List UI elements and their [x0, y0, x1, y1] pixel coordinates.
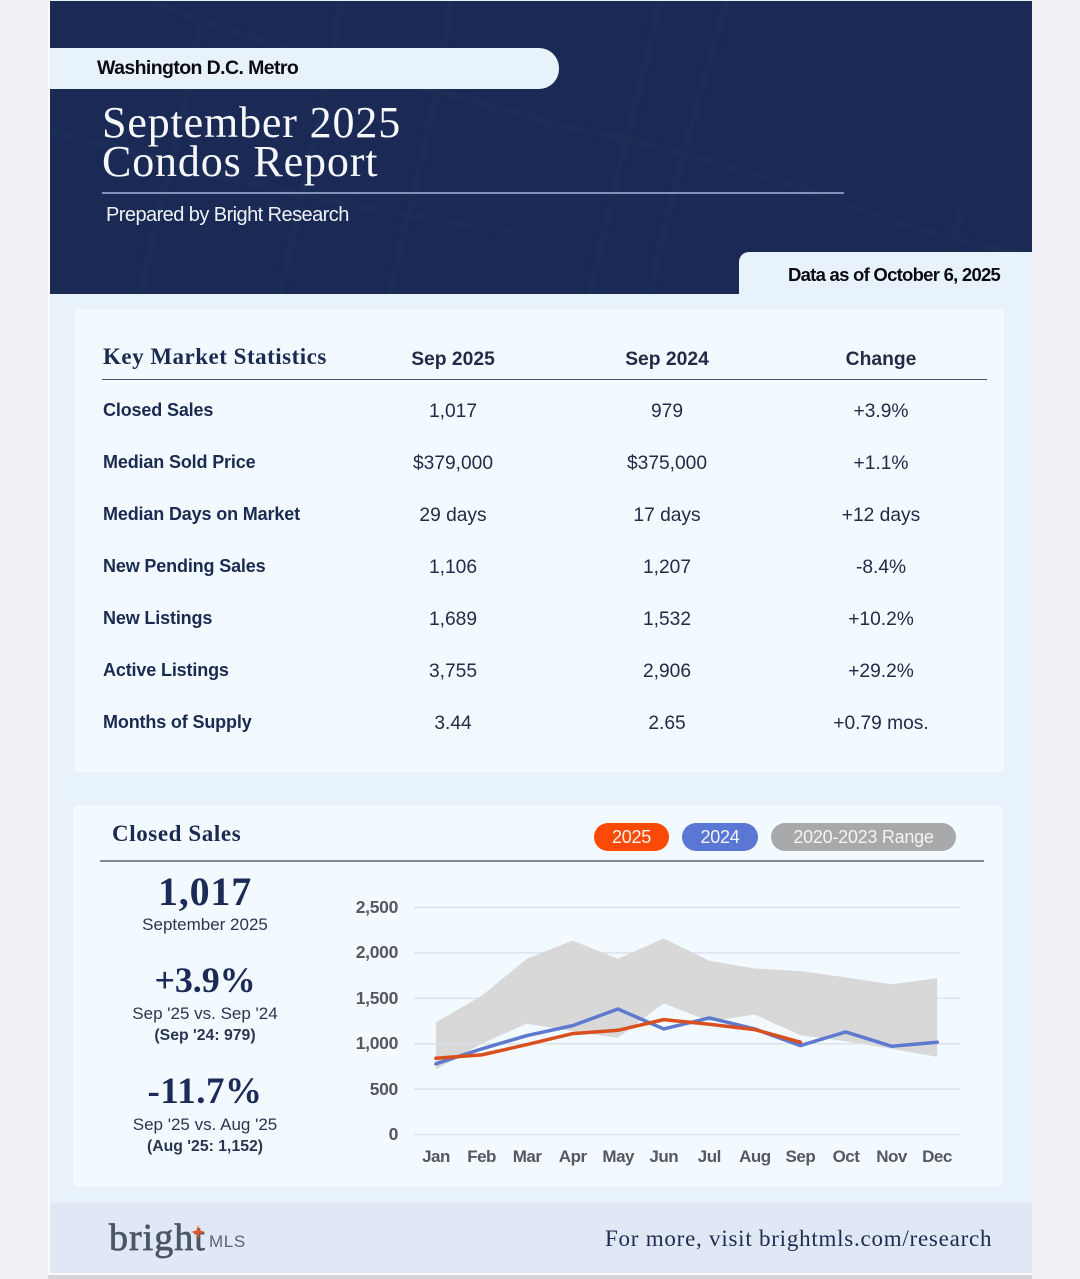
x axis labels: Apr	[559, 1147, 587, 1166]
column headers	[411, 349, 916, 370]
icon: orange star	[191, 1225, 205, 1239]
2025 line	[436, 1020, 800, 1058]
statistics heading: Key Market Statistics	[103, 344, 327, 369]
header rule	[102, 192, 844, 194]
stat: month over month: Sep '25 vs. Aug '25	[133, 1115, 277, 1134]
row: median days on market: +12 days	[842, 505, 920, 526]
row: new listings: New Listings	[103, 608, 212, 628]
stat: month over month	[133, 1071, 277, 1155]
x axis labels: Sep	[786, 1147, 815, 1166]
legend: 2024: 2024	[700, 827, 740, 847]
row: median days on market: 29 days	[419, 505, 487, 526]
row: months of supply: +0.79 mos.	[833, 713, 929, 734]
x axis labels: Oct	[833, 1147, 860, 1166]
region pill	[50, 48, 559, 89]
row: months of supply: 3.44	[434, 713, 472, 734]
row: new listings: 1,689	[429, 609, 477, 630]
closed sales heading: Closed Sales	[112, 821, 241, 846]
row: median days on market: 17 days	[633, 505, 701, 526]
footer link text: For more, visit brightmls.com/research	[605, 1226, 992, 1251]
legend: 2020-2023 range: 2020-2023 Range	[793, 827, 934, 847]
row: new pending sales: 1,207	[643, 557, 691, 578]
prepared by: Prepared by Bright Research	[106, 204, 349, 226]
panel: key market statistics	[74, 309, 1004, 772]
x axis labels: May	[602, 1147, 635, 1166]
x axis labels: Dec	[922, 1147, 952, 1166]
x axis labels: Feb	[467, 1147, 496, 1166]
data date tab	[739, 252, 1032, 294]
row: months of supply: 2.65	[648, 713, 686, 734]
column headers: Sep 2025	[411, 349, 495, 370]
x axis labels: Nov	[876, 1147, 908, 1166]
row: active listings: 2,906	[643, 661, 691, 682]
legend: 2024	[682, 823, 758, 851]
row: median sold price: +1.1%	[854, 453, 908, 474]
stat: current closed sales: 1,017	[158, 869, 252, 914]
row: active listings	[103, 660, 914, 682]
stat: year over year	[132, 960, 278, 1044]
logo: bright MLS: MLS	[209, 1232, 246, 1251]
x axis labels: Jun	[649, 1147, 678, 1166]
x axis labels	[422, 1147, 952, 1166]
row: active listings: Active Listings	[103, 660, 229, 680]
stat: month over month: -11.7%	[147, 1071, 263, 1112]
stat: year over year: (Sep '24: 979)	[154, 1027, 256, 1044]
row: closed sales	[103, 400, 908, 422]
row: closed sales: Closed Sales	[103, 400, 213, 420]
stat: current closed sales: September 2025	[142, 915, 268, 934]
row: new pending sales	[103, 556, 906, 578]
x axis labels: Mar	[513, 1147, 542, 1166]
row: median sold price: $375,000	[627, 453, 707, 474]
column headers: Change	[846, 349, 916, 370]
row: median sold price: $379,000	[413, 453, 493, 474]
2020-2023 range band	[436, 939, 937, 1069]
row: new listings: 1,532	[643, 609, 691, 630]
legend: 2020-2023 range	[771, 823, 956, 851]
report title: September 2025	[102, 98, 401, 147]
row: closed sales: 1,017	[429, 401, 477, 422]
row: median sold price: Median Sold Price	[103, 452, 256, 472]
stat: month over month: (Aug '25: 1,152)	[147, 1138, 263, 1155]
x axis labels: Jul	[698, 1147, 721, 1166]
row: months of supply	[103, 712, 929, 734]
logo: bright MLS: bright	[109, 1217, 206, 1259]
data date: Data as of October 6, 2025	[788, 264, 1000, 285]
row: median days on market: Median Days on Market	[103, 504, 300, 524]
row: new pending sales: -8.4%	[856, 557, 906, 578]
y axis labels	[356, 897, 399, 1144]
row: new pending sales: New Pending Sales	[103, 556, 266, 576]
x axis labels: Aug	[739, 1147, 771, 1166]
legend: 2025: 2025	[612, 827, 651, 847]
row: new listings	[103, 608, 914, 630]
footer band	[50, 1203, 1032, 1273]
report title	[102, 98, 401, 186]
panel: closed sales	[73, 805, 1002, 1187]
stat: year over year: +3.9%	[154, 960, 256, 1000]
y axis labels: 0	[389, 1124, 399, 1144]
2024 line	[436, 1009, 937, 1064]
header banner	[50, 1, 1032, 294]
y axis labels: 1,500	[356, 988, 399, 1008]
report title: Condos Report	[102, 137, 378, 186]
y axis labels: 2,000	[356, 942, 399, 962]
row: closed sales: +3.9%	[854, 401, 908, 422]
y axis labels: 2,500	[356, 897, 399, 917]
y axis labels: 500	[370, 1079, 399, 1099]
legend: 2025	[594, 823, 669, 851]
row: active listings: +29.2%	[848, 661, 914, 682]
stat: year over year: Sep '25 vs. Sep '24	[132, 1004, 278, 1023]
row: months of supply: Months of Supply	[103, 712, 252, 732]
row: new listings: +10.2%	[848, 609, 914, 630]
column headers: Sep 2024	[625, 349, 709, 370]
row: new pending sales: 1,106	[429, 557, 477, 578]
row: closed sales: 979	[651, 401, 683, 422]
x axis labels: Jan	[422, 1147, 450, 1166]
stat: current closed sales	[142, 869, 268, 934]
y axis labels: 1,000	[356, 1033, 399, 1053]
row: median sold price	[103, 452, 908, 474]
row: median days on market	[103, 504, 920, 526]
region name: Washington D.C. Metro	[97, 57, 298, 79]
row: active listings: 3,755	[429, 661, 477, 682]
